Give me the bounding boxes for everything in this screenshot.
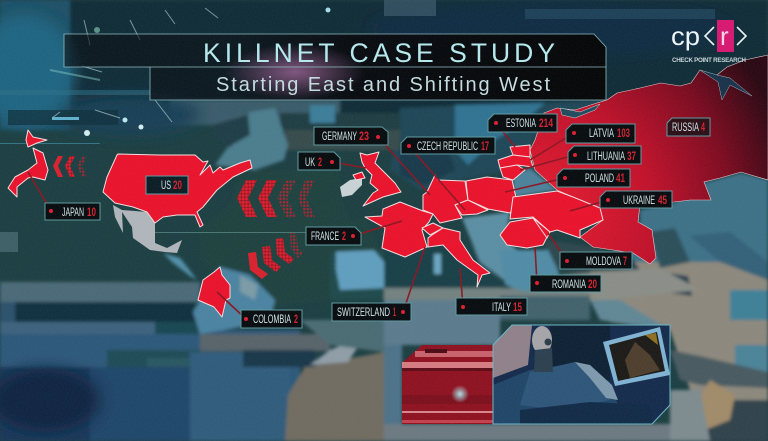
label: Estonia: [488, 114, 557, 147]
label: Ukraine: [570, 191, 672, 211]
label: Japan: 10: [87, 207, 96, 219]
Belarus: [513, 168, 557, 197]
logo: Check Point Research: r: [720, 21, 729, 51]
label: Switzerland: SWITZERLAND: [337, 307, 390, 319]
Japan: [8, 130, 48, 197]
Russia: [530, 55, 768, 264]
label: Czech Republic: [401, 137, 495, 210]
debris shards: [52, 8, 218, 122]
Ireland: [340, 178, 362, 197]
label: Romania: 20: [588, 279, 597, 291]
label: Czech Republic: CZECH REPUBLIC: [417, 141, 478, 153]
label: Japan: JAPAN: [62, 207, 84, 219]
chevrons: Atlantic to US: [237, 180, 315, 217]
glitch red panel: [402, 345, 493, 424]
label: Russia: 4: [701, 122, 705, 134]
label: Germany: GERMANY: [322, 131, 357, 143]
Africa: [285, 352, 384, 441]
label: Switzerland: 1: [393, 307, 396, 319]
label: Lithuania: [520, 146, 641, 170]
United States: [103, 154, 252, 227]
Arctic coast inlets: [700, 70, 752, 100]
label: Colombia: COLOMBIA: [253, 314, 291, 326]
Mediterranean: [384, 245, 505, 292]
North Atlantic: [200, 168, 380, 310]
label: Latvia: 103: [617, 128, 630, 140]
Arctic band: [170, 100, 340, 125]
label: Russia: RUSSIA: [672, 122, 699, 134]
label: Switzerland: [332, 247, 425, 321]
logo: Check Point Research: cp: [671, 21, 700, 51]
label: France: FRANCE: [311, 231, 339, 243]
Colombia: [198, 267, 230, 317]
label: Colombia: [217, 292, 302, 328]
label: US: [146, 176, 188, 194]
label: Latvia: [530, 124, 635, 160]
label: Moldova: MOLDOVA: [586, 256, 621, 268]
label: Moldova: [548, 233, 632, 269]
title panel: [64, 34, 606, 100]
label: France: 2: [342, 231, 346, 243]
heading: KILLNET CASE STUDY: [203, 38, 555, 68]
Middle East tan land: [590, 255, 768, 420]
logo: Check Point Research: [671, 20, 747, 64]
label: Moldova: 7: [623, 256, 627, 268]
label: Russia: [667, 118, 710, 136]
label: Estonia: ESTONIA: [506, 118, 536, 130]
label: Latvia: LATVIA: [589, 128, 614, 140]
label: US: 20: [173, 180, 182, 192]
label: UK: UK: [305, 157, 315, 169]
label: UK: 2: [318, 157, 322, 169]
chevrons: Atlantic to Colombia: [248, 233, 303, 279]
Europe countries: [365, 145, 603, 287]
label: Lithuania: 37: [627, 151, 636, 163]
Northern Europe: [390, 100, 610, 190]
image panel: hacker: [402, 325, 670, 424]
label: Poland: POLAND: [585, 173, 614, 185]
label: US: US: [161, 180, 171, 192]
United Kingdom: [353, 152, 401, 206]
Greenland: [215, 108, 288, 170]
label: Germany: [314, 127, 430, 195]
Gulf of Ob waters: [560, 104, 600, 118]
glitch strips: [0, 90, 150, 95]
label: Poland: [505, 169, 630, 192]
label: Romania: ROMANIA: [552, 279, 586, 291]
label: Ukraine: 45: [658, 195, 667, 207]
label: Italy: ITALY: [492, 302, 511, 314]
Kazakhstan and blue land: [590, 173, 768, 262]
bottom strip: [384, 424, 700, 441]
Mexico: [113, 205, 182, 253]
label: Japan: [28, 172, 100, 220]
label: Colombia: 2: [294, 314, 298, 326]
Balkans and central Europe: [462, 212, 530, 285]
subtitle: Starting East and Shifting West: [216, 74, 550, 96]
label: Ukraine: UKRAINE: [623, 195, 655, 207]
label: UK: [298, 152, 366, 170]
label: France: [306, 221, 402, 245]
South America: [193, 267, 275, 334]
chevrons: Japan: [53, 156, 87, 177]
man on couch illustration: [493, 325, 670, 424]
label: Czech Republic: 17: [481, 141, 489, 153]
logo: Check Point Research: CHECK POINT RESEARCH: [672, 57, 747, 64]
label: Italy: [456, 268, 527, 315]
Central America: [163, 253, 197, 280]
label: Estonia: 214: [539, 118, 553, 130]
label: Italy: 15: [513, 302, 522, 314]
label: Romania: [530, 247, 601, 292]
label: Poland: 41: [616, 173, 625, 185]
label: Lithuania: LITHUANIA: [587, 151, 625, 163]
label: Germany: 23: [359, 131, 369, 143]
